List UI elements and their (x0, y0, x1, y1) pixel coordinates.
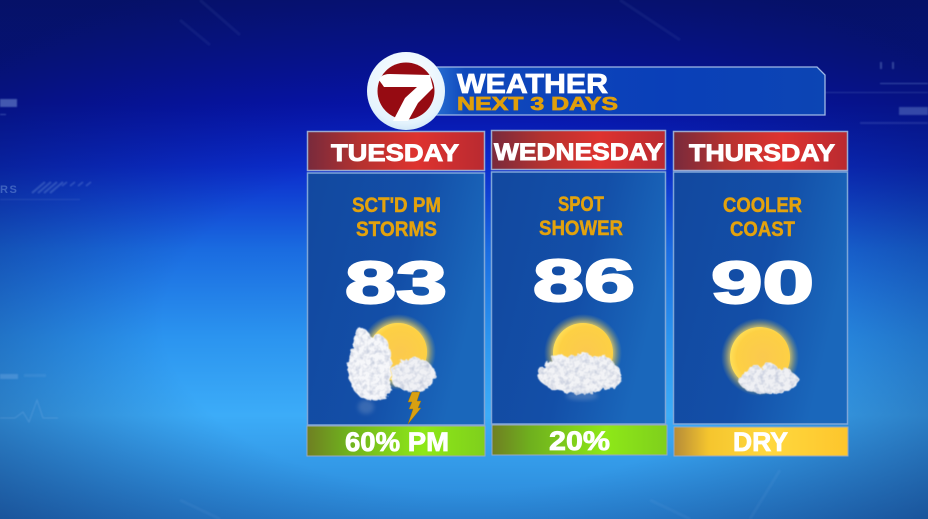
background: RS (0, 184, 18, 196)
banner subtitle: NEXT 3 DAYS (457, 93, 618, 114)
icon: sun with small cloud (721, 318, 799, 396)
Thursday conditions: COAST (730, 218, 795, 241)
Thursday header (674, 132, 848, 170)
Wednesday conditions: SHOWER (539, 217, 623, 240)
lightning bolt (408, 392, 421, 424)
Wednesday rain chance: 20% (549, 426, 610, 456)
Tuesday rain chance (307, 426, 485, 457)
Thursday conditions (723, 194, 802, 241)
Thursday rain chance (674, 427, 848, 457)
Tuesday header: TUESDAY (331, 140, 459, 167)
Thursday header: THURSDAY (689, 140, 835, 167)
icon: storm cloud and sun (348, 314, 436, 424)
panel: Tuesday (307, 132, 485, 457)
Thursday high temperature: 90 (711, 250, 814, 316)
header banner (425, 67, 825, 115)
Tuesday conditions: SCT'D PM (352, 194, 441, 217)
Wednesday conditions (539, 193, 623, 240)
Tuesday body (308, 173, 484, 425)
Tuesday rain chance: 60% PM (345, 427, 449, 457)
Thursday conditions: COOLER (723, 194, 802, 217)
station logo (367, 52, 445, 130)
icon: sun behind cloud (538, 314, 622, 400)
Wednesday rain chance (492, 425, 667, 456)
Wednesday high temperature: 86 (533, 248, 635, 314)
panel: Wednesday (492, 130, 667, 456)
Tuesday high temperature: 83 (345, 250, 447, 316)
Thursday rain chance: DRY (733, 427, 788, 457)
panel: Thursday (674, 132, 848, 457)
Wednesday conditions: SPOT (558, 193, 604, 216)
Tuesday conditions (352, 194, 441, 241)
Tuesday header (308, 132, 484, 170)
Wednesday header: WEDNESDAY (494, 139, 663, 166)
Thursday body (674, 172, 848, 424)
Wednesday header (492, 130, 666, 170)
Tuesday conditions: STORMS (356, 218, 437, 241)
banner title: WEATHER (457, 68, 608, 99)
Wednesday body (492, 172, 666, 424)
